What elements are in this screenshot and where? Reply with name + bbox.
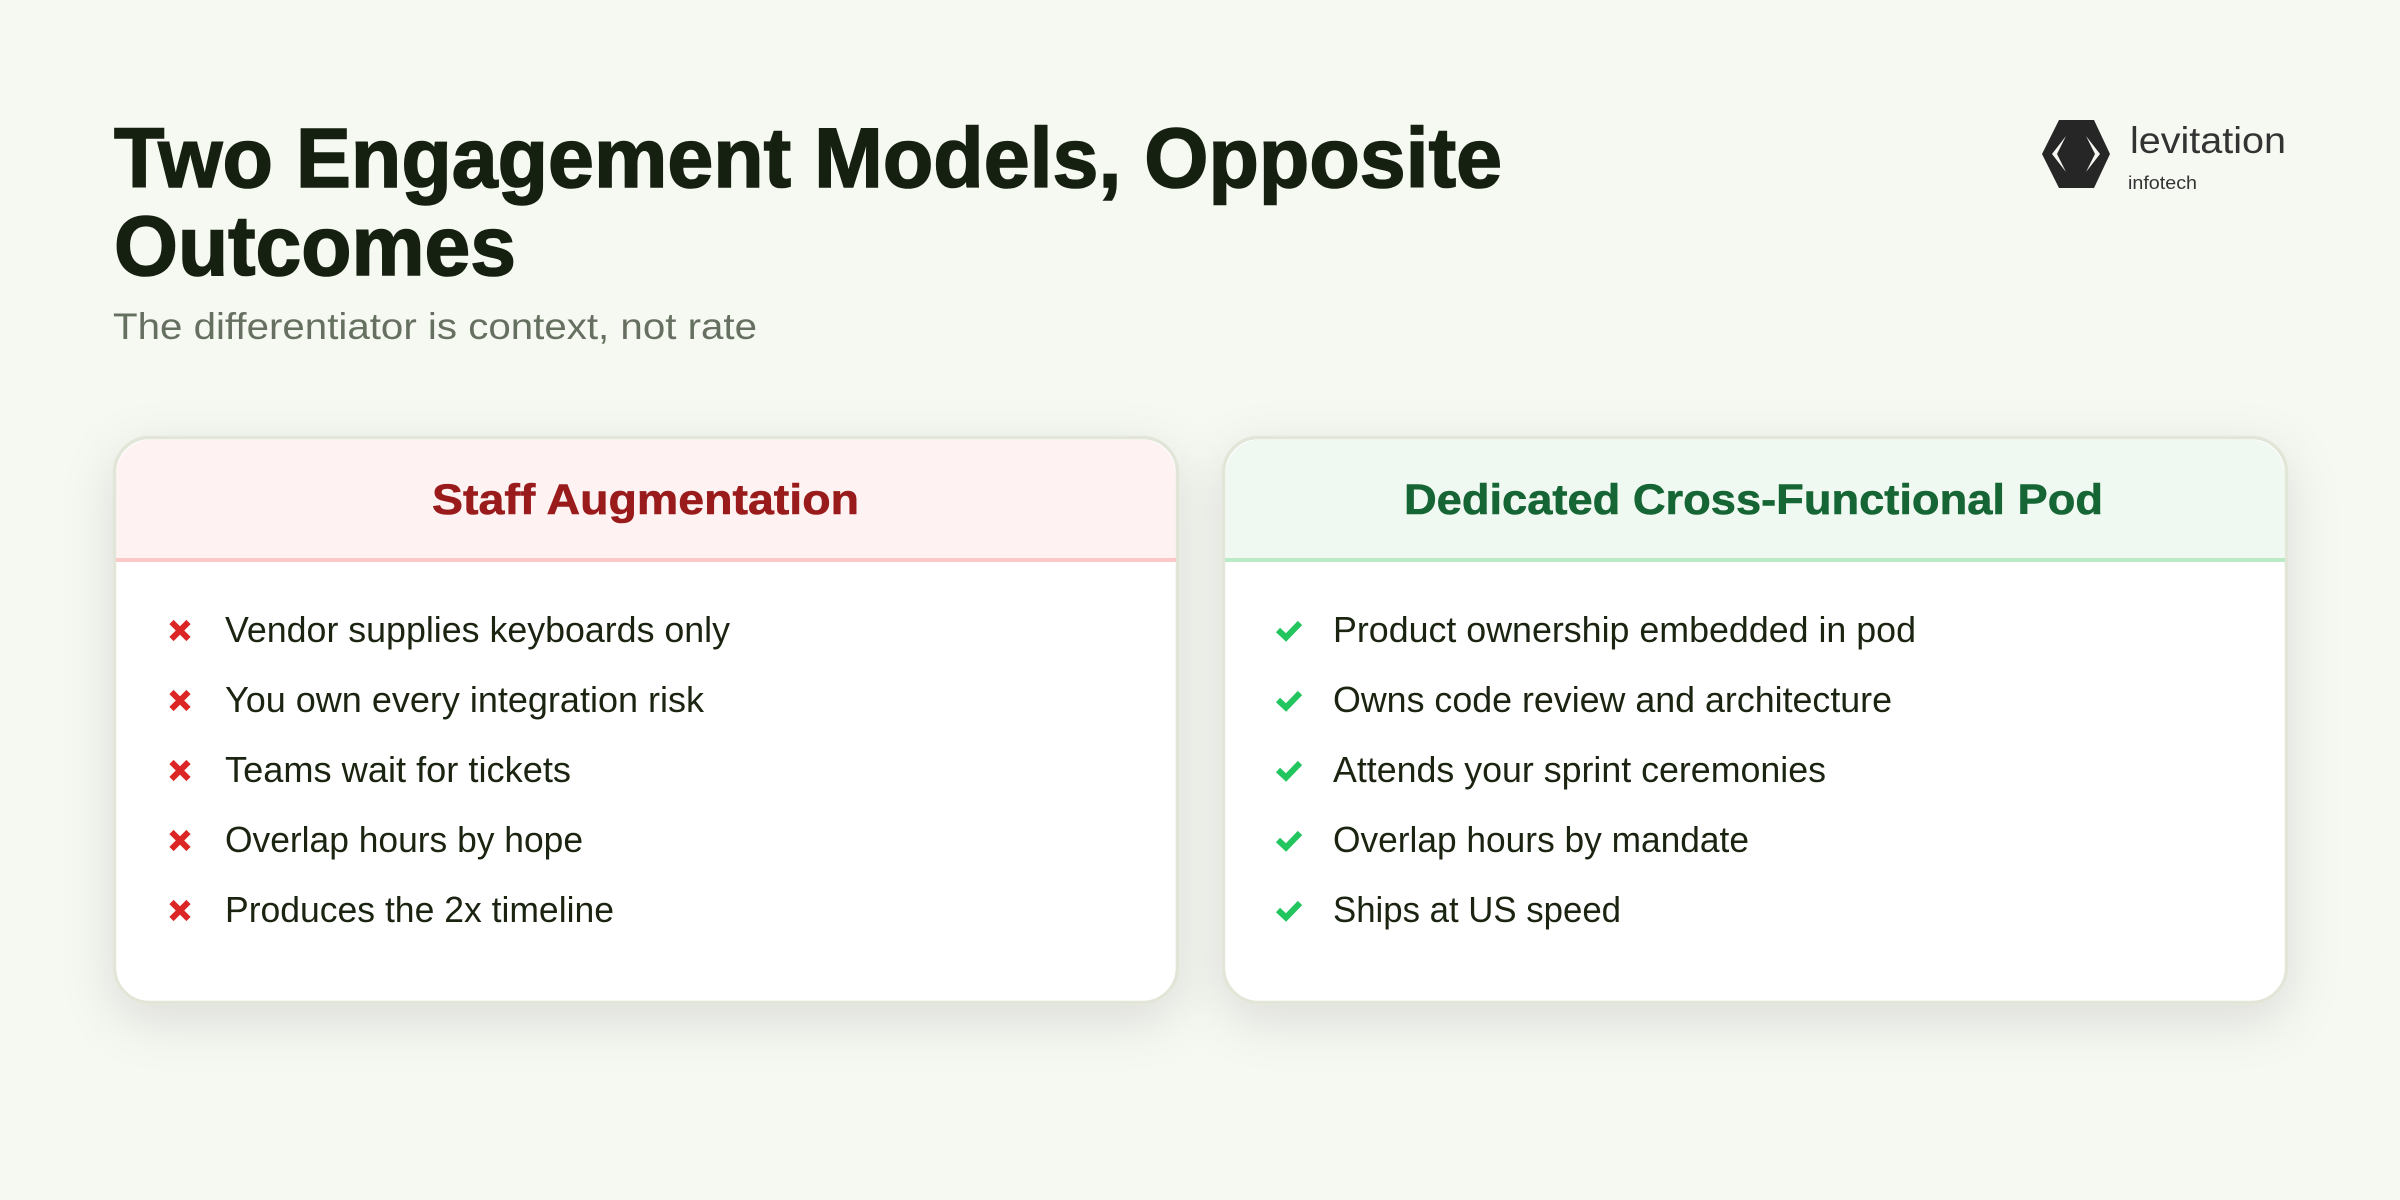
panel header: Dedicated Cross-Functional Pod: Dedicated Cross-Functional Pod [1404, 476, 2103, 524]
subtitle: The differentiator is context, not rate [113, 306, 757, 347]
item: Owns code review and architecture [1333, 679, 1892, 720]
icon: check [1278, 763, 1300, 778]
logo wordmark: levitation [2130, 120, 2286, 161]
item: Teams wait for tickets [225, 749, 571, 790]
icon: cross [172, 832, 188, 849]
panel header: Dedicated Cross-Functional Pod [1225, 440, 2285, 562]
icon: check [1278, 623, 1300, 638]
icon: check [1278, 693, 1300, 708]
title: Outcomes [114, 199, 516, 293]
icon: hexagon with chevrons [2042, 120, 2110, 188]
icon: cross [172, 692, 188, 709]
panel header: Staff Augmentation: Staff Augmentation [432, 476, 859, 524]
item: Attends your sprint ceremonies [1333, 749, 1826, 790]
item: Overlap hours by hope [225, 819, 583, 860]
icon: check [1278, 903, 1300, 918]
title: Two Engagement Models, Opposite [114, 111, 1502, 205]
title [114, 111, 1502, 293]
icon: cross [172, 762, 188, 779]
item: Ships at US speed [1333, 889, 1621, 930]
logo tagline: infotech [2128, 173, 2197, 193]
icon: cross [172, 902, 188, 919]
panel: Dedicated Cross-Functional Pod [1224, 438, 2286, 1002]
item: Produces the 2x timeline [225, 889, 614, 930]
list: dedicated pod benefits [1278, 609, 1916, 930]
icon: check [1278, 833, 1300, 848]
panel: Staff Augmentation [114, 438, 1178, 1002]
logo: levitation infotech [2042, 120, 2286, 193]
icon: cross [172, 622, 188, 639]
item: You own every integration risk [225, 679, 705, 720]
panel header: Staff Augmentation [116, 440, 1176, 562]
item: Vendor supplies keyboards only [225, 609, 730, 650]
list: staff augmentation drawbacks [172, 609, 730, 930]
item: Product ownership embedded in pod [1333, 609, 1916, 650]
item: Overlap hours by mandate [1333, 819, 1749, 860]
